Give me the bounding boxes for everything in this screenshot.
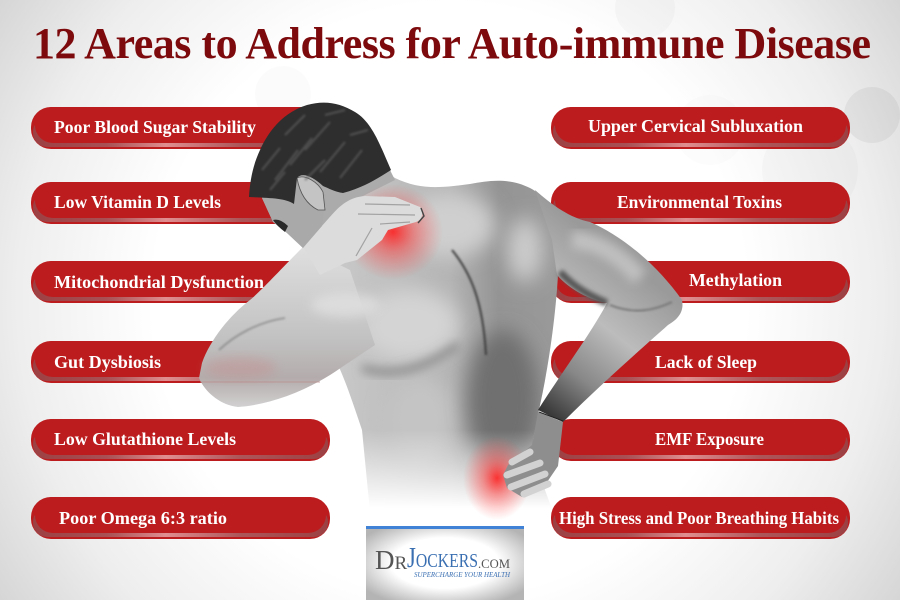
face xyxy=(262,175,326,248)
pill: Upper Cervical Subluxation: Upper Cervical Subluxation xyxy=(588,116,803,136)
pill: EMF Exposure: EMF Exposure xyxy=(655,429,764,449)
head xyxy=(249,103,391,248)
pill: Low Vitamin D Levels xyxy=(31,182,330,224)
logo top bar xyxy=(366,526,524,529)
logo wordmark blue: JOCKERS xyxy=(407,542,478,574)
pill: EMF Exposure xyxy=(551,419,850,461)
pill: Methylation xyxy=(551,261,850,303)
left column pills xyxy=(31,107,330,539)
left arm xyxy=(199,247,379,407)
title: 12 Areas to Address for Auto-immune Disease xyxy=(33,19,871,68)
neck xyxy=(262,130,395,248)
pill: High Stress and Poor Breathing Habits: High Stress and Poor Breathing Habits xyxy=(559,508,839,528)
pill: Environmental Toxins xyxy=(551,182,850,224)
torso xyxy=(340,177,558,502)
pill: Low Glutathione Levels: Low Glutathione Levels xyxy=(54,429,236,449)
logo tagline: SUPERCHARGE YOUR HEALTH xyxy=(414,570,511,579)
pill: Poor Omega 6:3 ratio: Poor Omega 6:3 ratio xyxy=(59,508,227,528)
pill: Poor Blood Sugar Stability xyxy=(31,107,330,149)
hand on neck xyxy=(303,196,424,275)
pill: Low Glutathione Levels xyxy=(31,419,330,461)
ear xyxy=(297,177,325,210)
hair xyxy=(249,103,391,204)
eye shadow xyxy=(273,220,288,232)
pill: Poor Blood Sugar Stability: Poor Blood Sugar Stability xyxy=(54,117,256,137)
logo wordmark domain: .COM xyxy=(478,556,510,571)
pill: Upper Cervical Subluxation xyxy=(551,107,850,149)
man holding neck and lower back xyxy=(199,103,682,520)
pill: Lack of Sleep xyxy=(551,341,850,383)
right arm xyxy=(535,190,682,422)
hand on lower back xyxy=(503,412,563,497)
pain glow: neck xyxy=(343,184,443,280)
right column pills xyxy=(551,107,850,539)
decorative background circles xyxy=(255,0,900,218)
pain glow: lower back xyxy=(463,436,531,520)
pill: Methylation: Methylation xyxy=(689,270,782,290)
pill: Gut Dysbiosis xyxy=(31,341,330,383)
pill: Low Vitamin D Levels: Low Vitamin D Levels xyxy=(54,192,221,212)
logo panel xyxy=(366,526,524,600)
pill: High Stress and Poor Breathing Habits xyxy=(551,497,850,539)
logo wordmark: DR xyxy=(375,545,408,575)
pill: Mitochondrial Dysfunction: Mitochondrial Dysfunction xyxy=(54,272,264,292)
pill: Lack of Sleep: Lack of Sleep xyxy=(655,352,757,372)
pill: Environmental Toxins: Environmental Toxins xyxy=(617,192,782,212)
pill: Mitochondrial Dysfunction xyxy=(31,261,330,303)
pill: Gut Dysbiosis: Gut Dysbiosis xyxy=(54,352,161,372)
pill: Poor Omega 6:3 ratio xyxy=(31,497,330,539)
